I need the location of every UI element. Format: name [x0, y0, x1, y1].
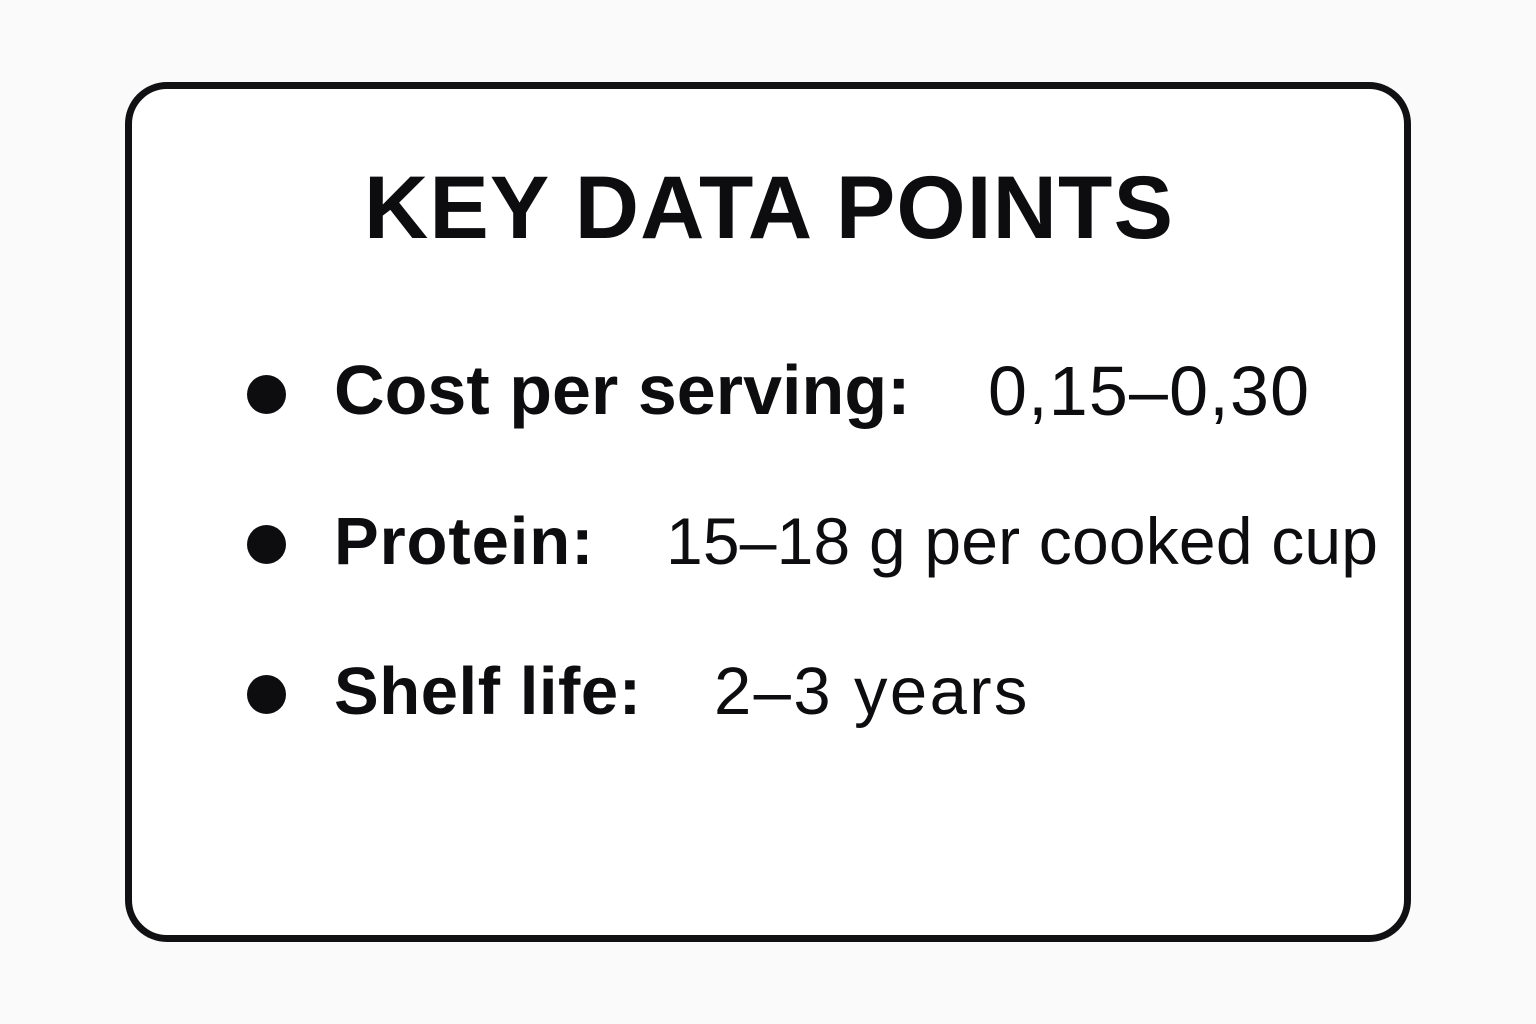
panel: key data points card [125, 82, 1411, 942]
bullet icon: shelf life [247, 675, 286, 714]
bullet icon: protein [247, 525, 286, 564]
text: cost per serving: Cost per serving: [334, 351, 911, 429]
text: shelf life: Shelf life: [334, 654, 642, 729]
bullet icon: cost [247, 375, 286, 414]
value: protein: 15–18 g per cooked cup [666, 504, 1378, 578]
value: cost per serving: 0,15–0,30 [988, 352, 1310, 430]
value: shelf life: 2–3 years [714, 654, 1030, 729]
text: protein: Protein: [334, 504, 594, 579]
title: KEY DATA POINTS [364, 157, 1174, 257]
